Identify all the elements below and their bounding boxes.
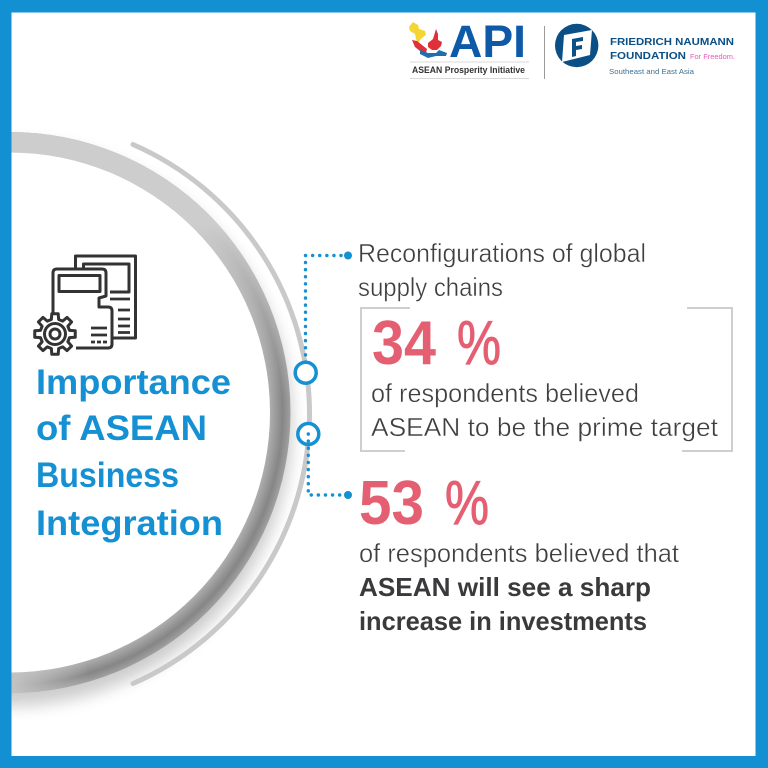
- slogan: For Freedom.: [690, 52, 735, 61]
- thick gray ring: [0, 132, 290, 693]
- text: prime target: of respondents believed: [371, 378, 639, 408]
- map icon: [409, 22, 447, 58]
- connector: top callout: [295, 252, 352, 383]
- logo: Friedrich Naumann Foundation: FOUNDATION: [610, 50, 686, 62]
- title: Integration: [36, 504, 223, 543]
- connector: bottom callout: [298, 424, 352, 499]
- logo: ASEAN Prosperity Initiative: [409, 16, 529, 79]
- API letters: API: [449, 16, 526, 67]
- text: supply chains heading: [358, 238, 646, 302]
- title: Importance: [36, 363, 231, 402]
- initiative caption: ASEAN Prosperity Initiative: [412, 65, 525, 76]
- text: prime target: ASEAN to be the prime target: [371, 412, 719, 442]
- text: sharp increase: of respondents believed that: [359, 538, 680, 568]
- text: prime target: [371, 378, 719, 442]
- title: [36, 363, 231, 543]
- foundation name: FRIEDRICH NAUMANN: [610, 36, 734, 48]
- text: supply chains heading: Reconfigurations of global: [358, 238, 646, 268]
- stat: 34%: 34: [372, 309, 436, 378]
- stat: 53%: %: [445, 469, 489, 538]
- region: Southeast and East Asia: [609, 67, 695, 76]
- text: sharp increase: ASEAN will see a sharp: [359, 572, 651, 602]
- logo divider: [544, 26, 545, 79]
- text: sharp increase: [359, 538, 680, 636]
- icon: documents with gear: [35, 256, 136, 354]
- text: sharp increase: increase in investments: [359, 606, 647, 636]
- bracket frame around 34%: [361, 308, 732, 451]
- text: supply chains heading: supply chains: [358, 272, 503, 302]
- title: of ASEAN: [36, 409, 207, 448]
- logo: Friedrich Naumann Foundation: [555, 24, 735, 76]
- stat: 53%: 53: [359, 469, 424, 538]
- F badge: [555, 24, 598, 67]
- shadow under ring: [0, 142, 292, 706]
- title: Business: [36, 456, 179, 495]
- thin outer arc: [133, 144, 310, 684]
- stat: 34%: [372, 309, 501, 378]
- stat: 34%: %: [457, 309, 501, 378]
- stat: 53%: [359, 469, 489, 538]
